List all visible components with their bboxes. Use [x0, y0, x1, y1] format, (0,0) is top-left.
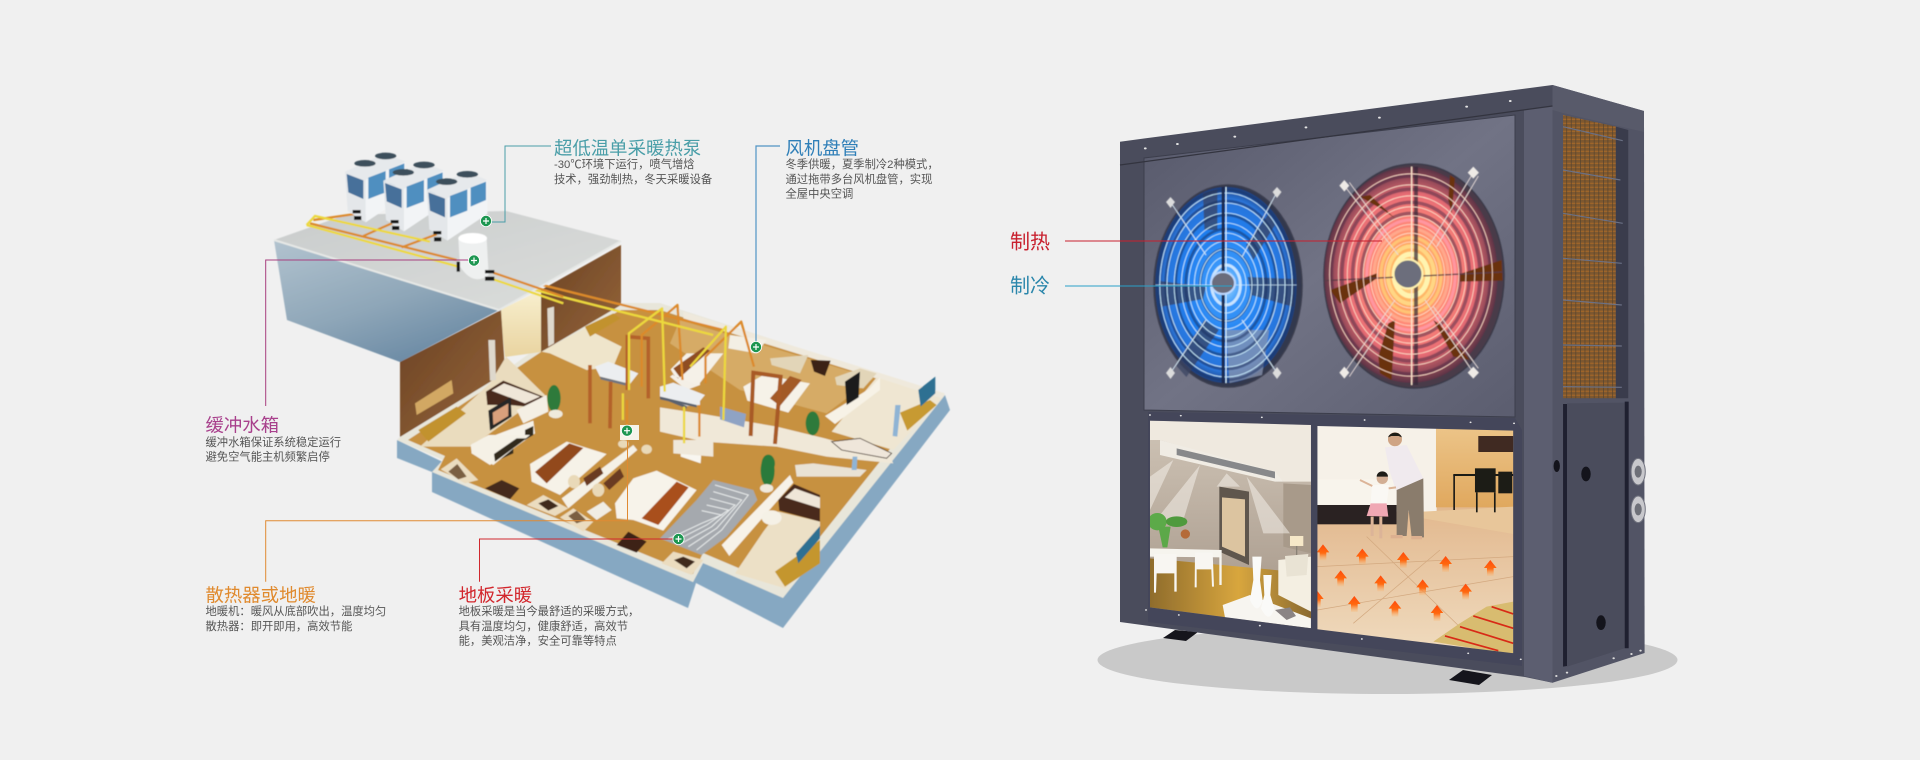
- leader line: heating: [1065, 240, 1382, 242]
- unit feet: [1163, 630, 1492, 685]
- orange pipes: [489, 272, 754, 437]
- text: radiator description: 地暖机：暖风从底部吹出，温度均匀: [206, 604, 386, 618]
- lower brown feature wall: [400, 310, 505, 437]
- bed upper: [671, 347, 723, 385]
- text: buffer tank description: 避免空气能主机频繁启停: [206, 450, 330, 464]
- bed: [743, 375, 810, 413]
- guard spokes: [1222, 187, 1225, 383]
- leader line: cooling: [1065, 285, 1232, 287]
- floor base outer side: [397, 395, 950, 628]
- wall: [722, 475, 793, 556]
- fan rim: [1154, 185, 1302, 387]
- guard rings: [1330, 174, 1492, 376]
- cream floor left room: [420, 357, 547, 447]
- guard spokes: [1325, 167, 1503, 385]
- heat pump units: [345, 153, 487, 241]
- bay window seat 3: [560, 508, 593, 532]
- dining table: [1150, 548, 1222, 585]
- photo: floor heating room: [1311, 425, 1517, 657]
- leader line: heat pump: [486, 146, 551, 222]
- main front panel: [1144, 115, 1515, 417]
- text: fan coil description: 冬季供暖，夏季制冷2种模式，: [786, 157, 939, 171]
- marker: heat pump: [480, 215, 492, 227]
- rooms: crop frame right: [660, 312, 945, 477]
- panel: building cutaway diagram: [274, 153, 950, 628]
- fan blades: [1160, 189, 1295, 383]
- cross wires: [1344, 173, 1478, 377]
- lower frame: [1148, 412, 1522, 666]
- heading: fan coil: 风机盘管: [786, 138, 859, 158]
- vases: [1250, 556, 1273, 604]
- wall niche: [415, 380, 453, 415]
- heading: heat pump: 超低温单采暖热泵: [554, 138, 701, 158]
- buffer tank: [458, 233, 489, 279]
- raised floor band: [1423, 507, 1513, 534]
- TV: [845, 372, 860, 405]
- white wall: [1317, 425, 1437, 512]
- pillow: [1285, 554, 1308, 577]
- buffer tank and valves: [353, 210, 494, 281]
- bay window seat 1: [441, 458, 478, 483]
- callout: 风机盘管: [750, 138, 939, 353]
- lower sideboard: [795, 463, 867, 477]
- cream floor back room: [542, 328, 622, 370]
- radiator: [681, 443, 702, 463]
- chair 1: [485, 480, 519, 499]
- dark rings: [1158, 190, 1294, 380]
- nightstand pillows: [568, 440, 652, 520]
- orange roof pipes: [310, 214, 563, 297]
- rooms: crop frame front: [441, 435, 820, 588]
- shower: [893, 405, 901, 437]
- unit front frame: [1120, 85, 1552, 683]
- leader line: fan coil: [756, 146, 780, 347]
- mount diamonds: [1166, 187, 1282, 379]
- upper desk: [585, 313, 621, 337]
- floor plate rim: [397, 303, 945, 598]
- lower side panel: [1554, 402, 1645, 677]
- mount diamonds: [1339, 167, 1479, 379]
- leader line: buffer tank: [266, 260, 474, 406]
- text: floor heating description: 地板采暖是当今最舒适的采暖方式，: [459, 604, 639, 618]
- frame screws: [1145, 414, 1522, 660]
- door frames: [590, 337, 648, 428]
- text: fan coil description: 全屋中央空调: [786, 186, 853, 200]
- ceiling vent: [1160, 440, 1283, 482]
- plant: [806, 411, 820, 435]
- plant: [1148, 513, 1187, 547]
- AC unit right: [660, 383, 700, 409]
- marker: buffer tank: [468, 255, 480, 266]
- bay window seat 4: [662, 552, 703, 575]
- callout: 散热器或地暖: [206, 425, 639, 633]
- leader line: radiator: [266, 431, 628, 582]
- fan disc: [1155, 187, 1297, 383]
- TV console upper: [471, 435, 530, 465]
- unit side face: [1552, 85, 1645, 683]
- front right room floor: [735, 512, 820, 588]
- back bedroom cream floor: [670, 320, 873, 413]
- doorway: [1219, 487, 1249, 565]
- left frame post: [1120, 158, 1139, 622]
- top band screws: [1144, 100, 1512, 149]
- text: radiator description: 散热器：即开即用，高效节能: [206, 619, 352, 633]
- man: [1385, 432, 1424, 539]
- back wall: [683, 312, 945, 398]
- girl: [1360, 471, 1396, 538]
- marker: radiator: [620, 425, 639, 440]
- bed 1: [530, 442, 607, 495]
- inner glow rings: [1367, 220, 1455, 330]
- chair: [811, 360, 831, 376]
- dining set: [1453, 468, 1513, 512]
- lamp: [1290, 536, 1303, 556]
- fan hub: [1211, 272, 1235, 294]
- panel holes: [1554, 460, 1606, 630]
- TV: [488, 397, 512, 431]
- wood floor: [408, 310, 932, 586]
- photo: air conditioned room: [1148, 420, 1313, 630]
- riser pipes and main pipes: [489, 272, 754, 443]
- sofa: [770, 355, 808, 373]
- table flowers: [1181, 529, 1190, 539]
- artwork: [1478, 436, 1513, 452]
- fan rim: [1324, 164, 1504, 388]
- guard rings: [1160, 193, 1292, 377]
- top band of side: [1552, 85, 1644, 132]
- panel top edge: [1120, 106, 1552, 165]
- tile lines: [1318, 536, 1513, 625]
- roof slab top: [274, 211, 621, 310]
- sofa 2: [835, 368, 877, 388]
- yellow pipes: [489, 278, 726, 443]
- corner post: [1524, 106, 1552, 683]
- stool: [762, 510, 782, 525]
- upper floor wall piece: [673, 440, 713, 457]
- sofa: [1278, 557, 1311, 612]
- chair 2: [617, 532, 647, 553]
- ground shadow: [1098, 626, 1678, 694]
- tile wall: [1436, 427, 1514, 507]
- fan: cooling (blue): [1154, 185, 1302, 387]
- desk: [418, 407, 466, 442]
- callout: 缓冲水箱: [206, 255, 480, 464]
- floor: [1150, 558, 1311, 628]
- air beams: [1150, 460, 1290, 533]
- rooms: crop frame left: [415, 307, 700, 465]
- TV on table: [775, 526, 820, 587]
- fan: heating (red): [1324, 164, 1504, 388]
- plant: [760, 455, 775, 493]
- ceiling: [1150, 421, 1311, 482]
- dark rings: [1331, 176, 1491, 374]
- TV console: [472, 421, 535, 465]
- door frame: [751, 373, 781, 444]
- bed corner: [670, 357, 700, 390]
- sideboard: [486, 381, 543, 407]
- plant lower: [762, 455, 775, 472]
- heating arrows: [1311, 544, 1497, 621]
- roof edge: [274, 240, 621, 310]
- text: floor heating description: 能，美观洁净，安全可靠等特点: [459, 634, 617, 648]
- corner bolts: [1555, 650, 1642, 677]
- main pipes over roof: [307, 214, 563, 303]
- fan hub: [1394, 260, 1422, 288]
- sideboard: [778, 484, 820, 522]
- rug: [1223, 595, 1311, 628]
- valves: [353, 210, 494, 281]
- text: heat pump description: -30℃环境下运行，喷气增焓: [554, 157, 695, 171]
- blue panel: [720, 407, 746, 427]
- guard cross wires: [1170, 192, 1277, 373]
- bay window seat 2: [527, 495, 568, 516]
- cream interior wall: [500, 290, 541, 357]
- yellow roof pipes: [307, 216, 563, 303]
- pipe connectors: [1631, 458, 1645, 523]
- book: [1275, 607, 1296, 620]
- marker: floor heating: [673, 533, 684, 545]
- fan disc: [1324, 167, 1498, 383]
- shower lower: [852, 457, 857, 470]
- sideboard: [832, 438, 892, 458]
- heading: radiator: 散热器或地暖: [206, 584, 316, 606]
- label: heating: 制热: [1010, 230, 1050, 254]
- white partition: [517, 395, 548, 423]
- callout: 地板采暖: [459, 533, 684, 648]
- dining chairs: [1154, 553, 1214, 593]
- bed 2: [615, 471, 697, 531]
- copper coil side grille: [1563, 115, 1628, 398]
- floor: [1317, 507, 1517, 657]
- callout: 超低温单采暖热泵: [480, 138, 712, 227]
- leader line: floor heating: [480, 539, 678, 582]
- upper brown feature wall: [541, 245, 621, 352]
- radiant floor heating mat: [660, 480, 757, 555]
- side table and TV: [900, 377, 937, 431]
- marker: fan coil: [750, 341, 762, 353]
- AC unit: [660, 383, 705, 407]
- wall art panels: [488, 307, 554, 381]
- AC unit left: [595, 362, 638, 387]
- right room floor: [832, 377, 942, 450]
- heading: buffer tank: 缓冲水箱: [206, 414, 279, 436]
- floor heating mat: [1433, 602, 1513, 655]
- heading: floor heating: 地板采暖: [459, 584, 532, 606]
- panel: heat pump unit: [1120, 85, 1645, 685]
- right wall: [1283, 483, 1311, 553]
- bed pillows and head: [728, 335, 767, 353]
- right room partition: [825, 377, 880, 424]
- plant: [547, 385, 563, 418]
- roof block left wall: [274, 240, 499, 362]
- sofa: [1317, 505, 1397, 524]
- text: fan coil description: 通过拖带多台风机盘管，实现: [786, 172, 932, 186]
- fan blades: [1330, 175, 1503, 380]
- partition between bedrooms: [562, 445, 637, 508]
- text: floor heating description: 具有温度均匀，健康舒适，高效节: [459, 619, 628, 633]
- front band: [660, 407, 893, 463]
- text: buffer tank description: 缓冲水箱保证系统稳定运行: [206, 435, 341, 449]
- bedding pillows: [583, 467, 624, 490]
- label: cooling: 制冷: [1010, 274, 1050, 298]
- text: heat pump description: 技术，强劲制热，冬天采暖设备: [554, 172, 712, 186]
